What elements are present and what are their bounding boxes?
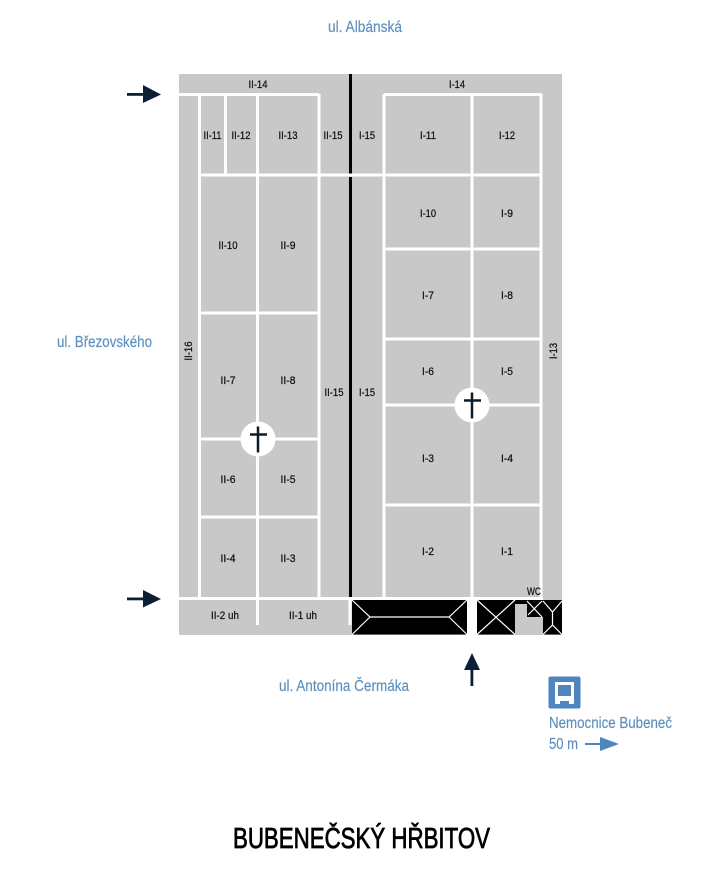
plot labels: II-16 xyxy=(183,342,195,360)
plot labels: II-15 xyxy=(324,387,344,399)
plot labels: II-5 xyxy=(280,474,296,486)
plot labels: II-6 xyxy=(220,474,236,486)
plot labels: I-11 xyxy=(420,130,436,142)
transit distance: 50 m xyxy=(549,736,578,753)
building: main hall xyxy=(352,600,467,634)
plot labels: I-3 xyxy=(422,453,434,465)
plot labels: I-13 xyxy=(548,343,560,359)
plot labels xyxy=(183,79,560,622)
plot labels: I-2 xyxy=(422,546,434,558)
plot labels: I-5 xyxy=(501,366,513,378)
arrow: toward transit stop xyxy=(585,737,619,751)
plot labels: I-8 xyxy=(501,290,513,302)
plot labels: I-10 xyxy=(420,208,436,220)
street label: ul. Albánská: ul. Albánská xyxy=(328,19,402,36)
arrow: upper left entrance xyxy=(127,85,161,103)
plot labels: I-15 xyxy=(359,130,375,142)
plot labels: WC xyxy=(527,586,541,598)
plot labels: II-12 xyxy=(232,130,250,142)
plot labels: II-13 xyxy=(278,130,298,142)
central dividing wall xyxy=(349,74,352,597)
plot labels: II-4 xyxy=(220,553,236,565)
arrow: lower left entrance xyxy=(127,590,161,608)
plot labels: I-4 xyxy=(501,453,513,465)
street label: ul. Antonína Čermáka: ul. Antonína Čermáka xyxy=(279,678,409,695)
plot labels: I-1 xyxy=(501,546,513,558)
plot labels: II-14 xyxy=(248,79,268,91)
icon: chapel cross right xyxy=(454,388,490,422)
transit stop name: Nemocnice Bubeneč xyxy=(549,715,672,732)
plot labels: II-1 uh xyxy=(289,610,317,622)
white paths xyxy=(179,94,543,625)
street label: ul. Březovského: ul. Březovského xyxy=(57,334,152,351)
cemetery map xyxy=(179,74,562,636)
plot labels: I-15 xyxy=(359,387,375,399)
plot labels: II-15 xyxy=(324,130,342,142)
entrance gap xyxy=(467,598,477,636)
building: right wing xyxy=(477,600,562,634)
icon: transit stop xyxy=(548,676,580,708)
plot labels: II-10 xyxy=(218,240,238,252)
title: BUBENEČSKÝ HŘBITOV xyxy=(233,821,490,855)
plot labels: II-9 xyxy=(280,240,296,252)
plot labels: I-12 xyxy=(499,130,515,142)
plot labels: II-2 uh xyxy=(211,610,239,622)
plot labels: I-9 xyxy=(501,208,513,220)
arrow: main entrance xyxy=(464,653,480,686)
map background xyxy=(179,74,562,635)
plot labels: I-14 xyxy=(449,79,465,91)
plot labels: II-8 xyxy=(280,375,296,387)
plot labels: I-7 xyxy=(422,290,434,302)
plot labels: II-7 xyxy=(220,375,236,387)
icon: chapel cross left xyxy=(240,422,276,456)
plot labels: II-11 xyxy=(204,130,222,142)
plot labels: I-6 xyxy=(422,366,434,378)
plot labels: II-3 xyxy=(280,553,296,565)
